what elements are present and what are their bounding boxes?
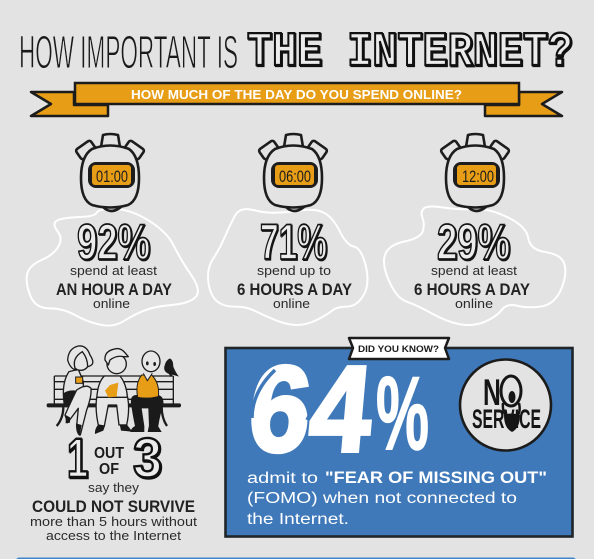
illustration: three people on a bench <box>47 346 181 436</box>
big number: 64%: % <box>376 356 429 472</box>
text block: could not survive: more than 5 hours without <box>30 514 197 529</box>
stat: 1 out of 3: 3 <box>133 426 162 489</box>
text: fear of missing out: the Internet. <box>247 511 349 528</box>
icon: no service <box>460 360 551 450</box>
text: fear of missing out <box>247 468 547 528</box>
stat: 92%: online <box>93 296 130 311</box>
next panel edge <box>16 558 576 559</box>
blob outline 2 <box>208 209 367 325</box>
icon: stopwatch 12:00: 12:00 <box>462 167 494 186</box>
text block: could not survive: COULD NOT SURVIVE <box>32 498 195 516</box>
stat: 71%: 6 HOURS A DAY <box>237 281 352 299</box>
stat: 92%: 92% <box>77 214 150 270</box>
icon: no service: SERVICE <box>472 404 541 434</box>
big number: 64%: 64 <box>244 340 378 477</box>
badge: did you know: DID YOU KNOW? <box>358 344 439 355</box>
stat: 29%: 29% <box>437 214 510 270</box>
stat: 92% <box>56 214 172 311</box>
blob outline 3 <box>384 206 565 325</box>
stat: 1 out of 3: 1 <box>67 426 88 489</box>
text: fear of missing out: admit to <box>247 470 318 487</box>
ribbon banner: HOW MUCH OF THE DAY DO YOU SPEND ONLINE? <box>131 88 462 102</box>
stat: 1 out of 3 <box>67 426 162 489</box>
stat: 92%: AN HOUR A DAY <box>56 281 172 299</box>
icon: stopwatch 01:00: 01:00 <box>96 167 128 186</box>
stat: 1 out of 3: OF <box>99 461 119 478</box>
badge: did you know <box>349 338 449 359</box>
blob outline 1 <box>27 209 198 326</box>
text: fear of missing out: "FEAR OF MISSING OUT" <box>325 468 547 487</box>
stat: 29% <box>414 214 530 311</box>
title: HOW IMPORTANT IS <box>19 26 238 78</box>
stat: 92%: spend at least <box>70 263 157 278</box>
stat: 29%: spend at least <box>431 263 517 278</box>
text block: could not survive: say they <box>88 480 140 495</box>
stat: 1 out of 3: OUT <box>94 445 124 462</box>
ribbon banner <box>31 83 562 116</box>
text: fear of missing out: (FOMO) when not connected to <box>247 490 517 507</box>
icon: stopwatch 12:00 <box>440 134 510 211</box>
stat: 71%: spend up to <box>257 263 331 278</box>
icon: stopwatch 06:00: 06:00 <box>279 167 311 186</box>
icon: no service: NO <box>483 372 520 413</box>
stat: 29%: online <box>455 296 493 311</box>
panel: did you know <box>226 338 572 536</box>
stat: 29%: 6 HOURS A DAY <box>414 281 530 299</box>
text block: could not survive: access to the Internet <box>46 528 181 543</box>
icon: stopwatch 06:00 <box>258 134 328 211</box>
icon: stopwatch 01:00 <box>75 134 145 211</box>
stat: 71%: 71% <box>260 214 327 270</box>
stat: 71% <box>237 214 352 311</box>
text block: could not survive <box>30 480 197 543</box>
stat: 71%: online <box>273 296 310 311</box>
